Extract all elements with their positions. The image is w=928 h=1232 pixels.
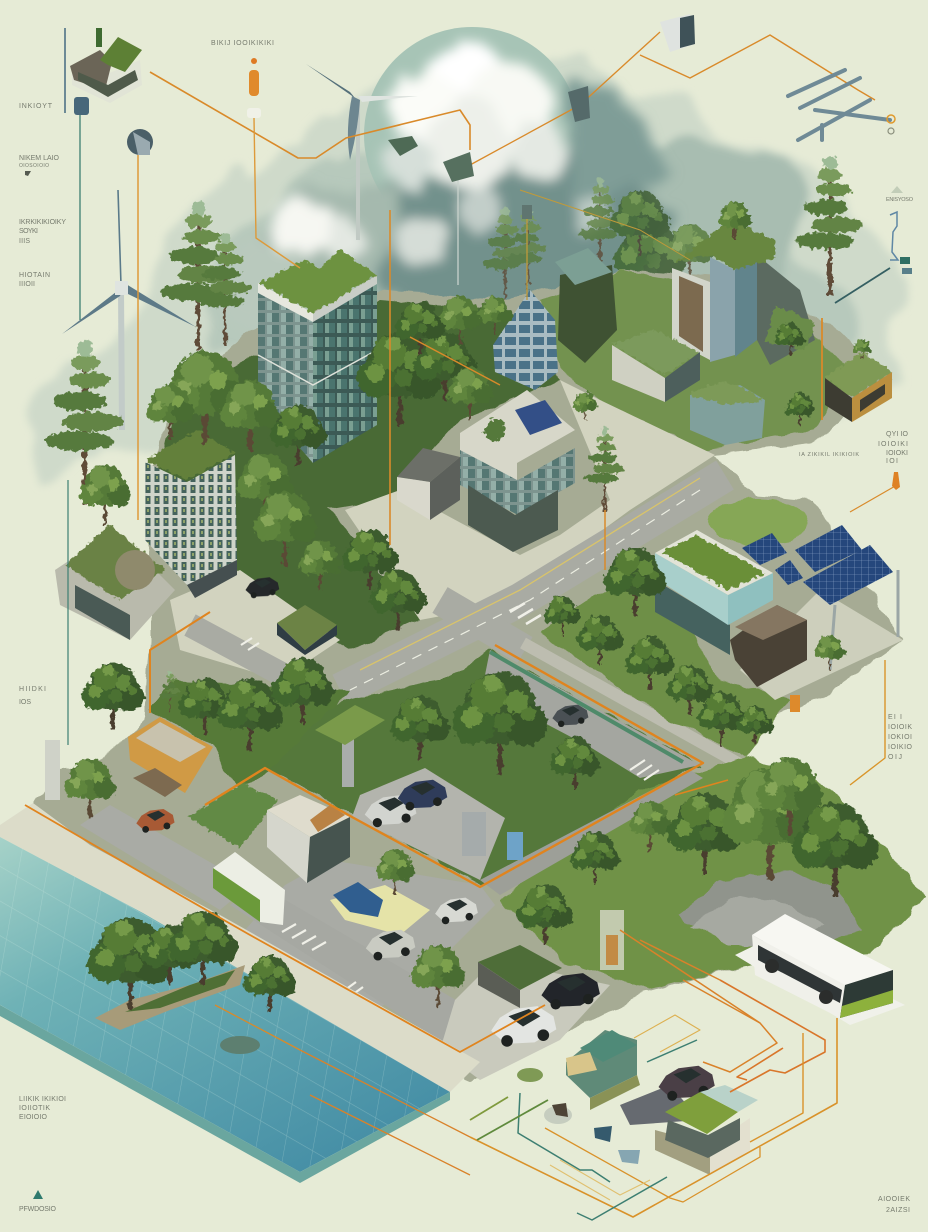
city ground — [20, 270, 927, 1082]
sphere backdrop — [364, 27, 580, 243]
kiosk: lower centre — [462, 812, 523, 860]
labels: left 3: SOYKI — [19, 228, 38, 235]
icon: right side legend glyph — [890, 186, 912, 274]
green roof building with solar array — [655, 525, 898, 687]
park block — [265, 650, 700, 885]
device: top left rooftop module — [65, 28, 142, 115]
trees: middle right — [544, 548, 845, 745]
labels: bottom right — [878, 1196, 910, 1214]
labels: right 2: IOI — [886, 458, 898, 465]
park pillar building — [315, 705, 385, 787]
shore sand — [0, 803, 480, 1092]
circular lawn — [708, 499, 808, 545]
labels: bottom right: AIOOIEK — [878, 1196, 910, 1203]
rock face highlight — [690, 895, 825, 945]
labels: left 2: NIKEM LAIO — [19, 155, 60, 162]
service tower: orange — [600, 910, 624, 970]
labels: right 2: IOIOKI — [886, 450, 908, 457]
circuit lines: right side — [822, 268, 897, 785]
labels: bottom right: 2AIZSI — [886, 1207, 910, 1214]
labels: left 3: IKRKIKIKIOIKY — [19, 219, 66, 226]
trees: park — [64, 658, 620, 1008]
labels: left 5: HIIDKI — [19, 686, 46, 693]
car and pad: lower hub — [620, 1066, 715, 1125]
labels: right 2 — [878, 431, 909, 465]
labels: right 3 — [888, 714, 913, 761]
wind turbine: left — [62, 190, 196, 430]
icon: orange marker — [247, 58, 261, 118]
labels: right 3: OIJ — [888, 754, 902, 761]
trees: upper city — [43, 156, 871, 630]
labels: left 5 — [19, 686, 46, 706]
tower building: centre — [460, 390, 575, 552]
icon: ring pair — [887, 115, 895, 134]
labels: left 5: IOS — [19, 699, 31, 706]
labels: lower left: EIOIOIO — [19, 1114, 48, 1121]
solar facade: upper centre — [493, 290, 558, 390]
drone and sensors: sky — [388, 86, 590, 219]
blue tarp shelter — [333, 882, 383, 917]
tower building: upper right — [672, 220, 815, 365]
haze: watercolour backdrop — [30, 60, 905, 470]
road markings — [350, 478, 700, 690]
labels: left 4: HIOTAIN — [19, 272, 50, 279]
building: small plaza kiosk — [277, 605, 337, 655]
labels: right 2: QYI IO — [886, 431, 909, 438]
rock outcrop — [678, 870, 860, 945]
device: top left sensor — [127, 129, 153, 155]
right meadow strip — [540, 560, 790, 757]
labels: right 3: IOKIOI — [888, 734, 912, 741]
labels: lower left: IOIIOTIK — [19, 1105, 50, 1112]
pipes: top right — [788, 70, 890, 140]
icon: right orange pin — [892, 472, 900, 490]
labels: left 3 — [19, 219, 66, 245]
main roads — [190, 475, 745, 767]
labels: left 3: IIIS — [19, 238, 30, 245]
labels: right 3: IOIKIO — [888, 744, 913, 751]
forest: lower right — [629, 758, 878, 895]
houses: lower left — [128, 717, 350, 925]
orange pavilion: far right — [825, 352, 892, 422]
tower building: left — [145, 430, 237, 598]
trees: island — [87, 910, 296, 1012]
labels: lower left — [19, 1096, 66, 1121]
marker: orange figure on pad — [790, 695, 800, 712]
circuit lines: lower hub — [470, 980, 837, 1220]
lower park trees ground — [150, 680, 350, 790]
crosswalks — [241, 638, 659, 995]
clouds and mist — [210, 43, 670, 340]
hub building: lower right — [655, 1085, 758, 1175]
parking and roads: lower — [80, 768, 703, 1080]
bus — [735, 914, 905, 1025]
solar pad — [740, 590, 903, 700]
labels: left 4 — [19, 272, 50, 288]
upper right lawns — [540, 270, 850, 450]
labels: top: BIKIJ IOOIKIKIKI — [211, 40, 274, 47]
small devices: lower hub — [517, 1068, 640, 1164]
labels: right 1: ENISYOSO — [886, 197, 914, 203]
small building: centre road — [478, 945, 562, 1008]
icon: teal triangle — [33, 1190, 43, 1199]
terrace building: far left — [55, 525, 175, 640]
inner park road — [482, 650, 700, 778]
green bus building: lower hub — [566, 1030, 640, 1110]
multi level green tower — [555, 248, 617, 363]
lower forest ground — [500, 757, 927, 990]
island — [95, 965, 245, 1030]
lake water — [0, 837, 450, 1183]
labels: left 4: IIIOII — [19, 281, 35, 288]
pavement junction — [170, 380, 715, 680]
labels: left 1: INKIOYT — [19, 103, 53, 110]
labels: right 2: IOIOIKI — [878, 441, 908, 448]
device: top right module — [660, 14, 695, 52]
wind turbine: upper — [306, 64, 418, 240]
circuit lines: city — [25, 612, 760, 1175]
labels: under city: IA ZIKIKIL IKIKIOIK — [799, 452, 859, 458]
tower building: centre left — [258, 250, 377, 463]
parked cars — [136, 577, 600, 1047]
labels: lower left: LIIKIK IKIKIOI — [19, 1096, 66, 1103]
circuit lines: top — [68, 32, 875, 745]
labels: left 2: OIOSOIOIO — [19, 163, 49, 169]
upper forest ground — [155, 300, 560, 650]
faded trees in mist — [482, 177, 714, 320]
labels: right 3: EI I — [888, 714, 902, 721]
labels: left 2 — [19, 155, 60, 176]
labels: bottom left: PFWDOSIO — [19, 1206, 57, 1213]
left kiosk — [45, 740, 60, 800]
small house: centre — [397, 448, 460, 520]
labels: right 3: IOIOIK — [888, 724, 912, 731]
low buildings: upper right — [612, 305, 815, 445]
